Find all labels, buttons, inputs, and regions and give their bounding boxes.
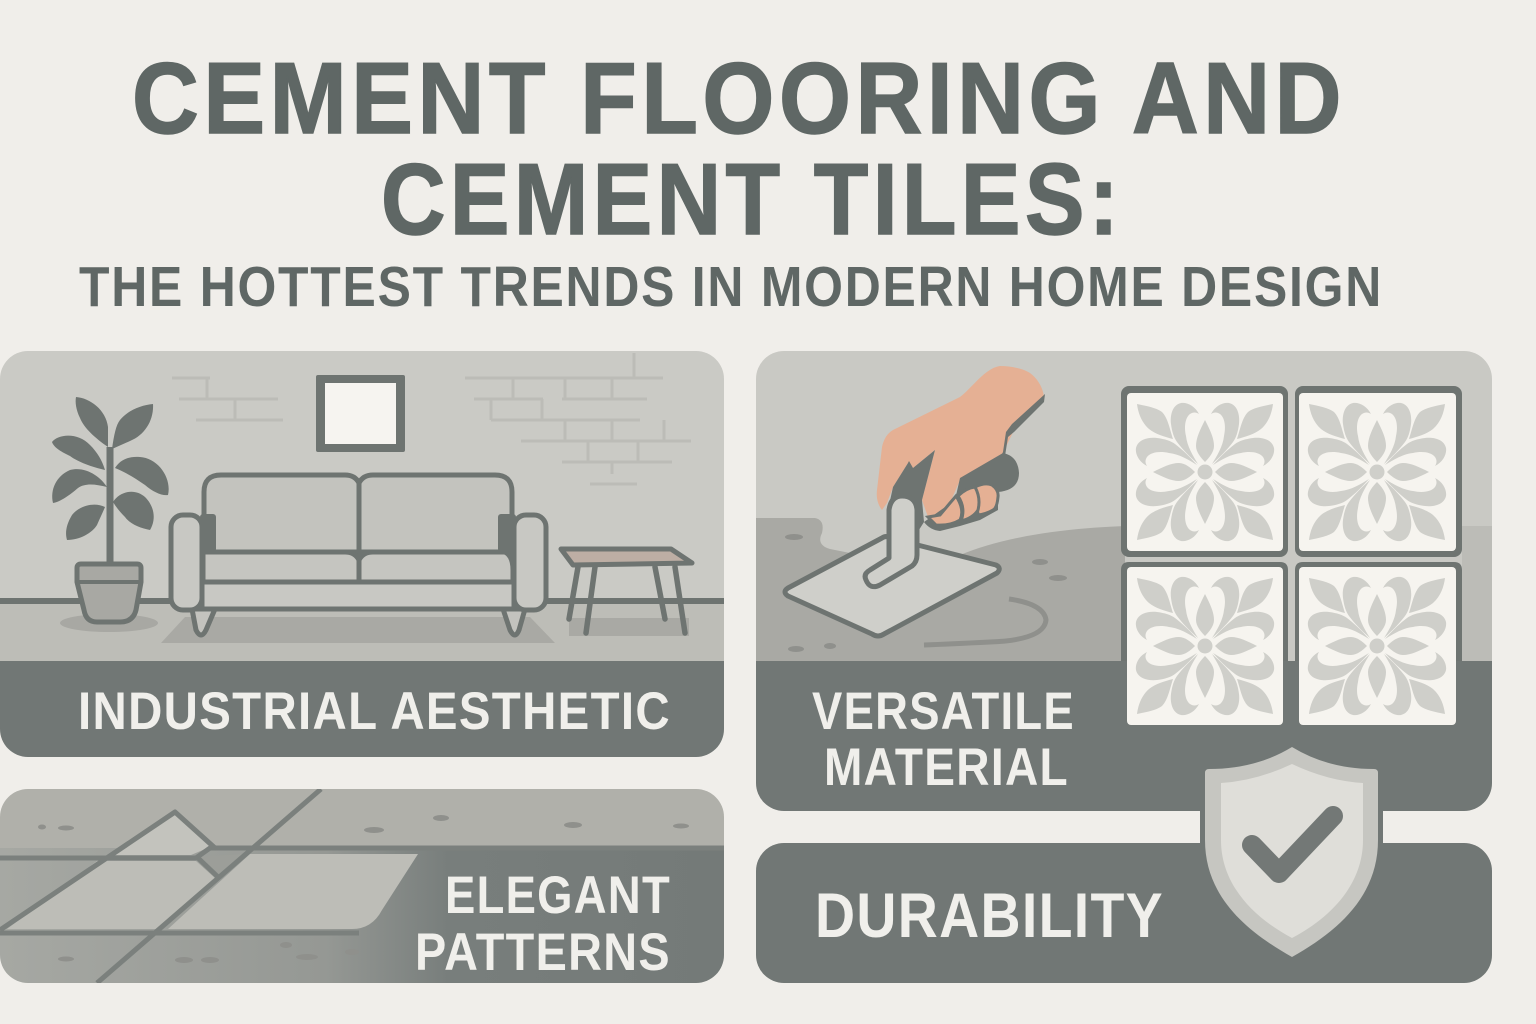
tile: bottom left	[1127, 567, 1283, 725]
icon: hand with trowel	[865, 366, 1045, 587]
panel: elegant patterns	[0, 789, 724, 983]
tile: top left	[1127, 393, 1283, 551]
icon: side table	[561, 549, 692, 636]
light tiles	[7, 815, 418, 929]
panel: durability	[756, 843, 1492, 983]
trowel streak	[924, 599, 1046, 645]
tile: bottom right	[1299, 567, 1456, 725]
floor specks	[38, 815, 689, 963]
icon: sofa	[161, 475, 555, 643]
label: industrial aesthetic: INDUSTRIAL AESTHETIC	[78, 682, 671, 741]
panel: industrial aesthetic	[0, 351, 724, 757]
label: elegant patterns: PATTERNS	[415, 923, 671, 982]
icon: trowel plate	[785, 536, 999, 636]
title: CEMENT TILES:	[381, 144, 1123, 256]
label: versatile material: VERSATILE	[812, 682, 1075, 741]
wet cement ground	[756, 518, 1125, 661]
upper floor	[0, 789, 724, 849]
label: versatile material	[812, 692, 1072, 785]
tile frames	[1121, 386, 1462, 661]
title: CEMENT FLOORING AND	[132, 43, 1346, 155]
brick pattern right	[465, 353, 691, 484]
icon: potted plant	[52, 397, 169, 632]
floor	[0, 601, 724, 661]
panel: versatile material	[756, 351, 1492, 811]
title	[132, 43, 1346, 256]
right side strip shading	[1462, 526, 1492, 661]
label band	[0, 661, 724, 757]
cement specks	[785, 534, 1067, 652]
label band	[756, 661, 1492, 811]
label: durability: DURABILITY	[815, 881, 1164, 951]
icon: shield with check	[1200, 747, 1383, 957]
floor line	[0, 598, 724, 604]
lower floor and label band	[0, 848, 724, 983]
tile joint lines	[0, 789, 724, 983]
label: elegant patterns	[418, 876, 670, 970]
brick pattern left	[172, 378, 283, 420]
label: elegant patterns: ELEGANT	[445, 866, 671, 925]
wall	[0, 351, 724, 601]
subtitle: THE HOTTEST TRENDS IN MODERN HOME DESIGN	[79, 255, 1383, 319]
wall	[756, 351, 1492, 661]
tile: top right	[1299, 393, 1456, 551]
icon: wall picture	[316, 375, 405, 452]
label: versatile material: MATERIAL	[824, 738, 1069, 797]
